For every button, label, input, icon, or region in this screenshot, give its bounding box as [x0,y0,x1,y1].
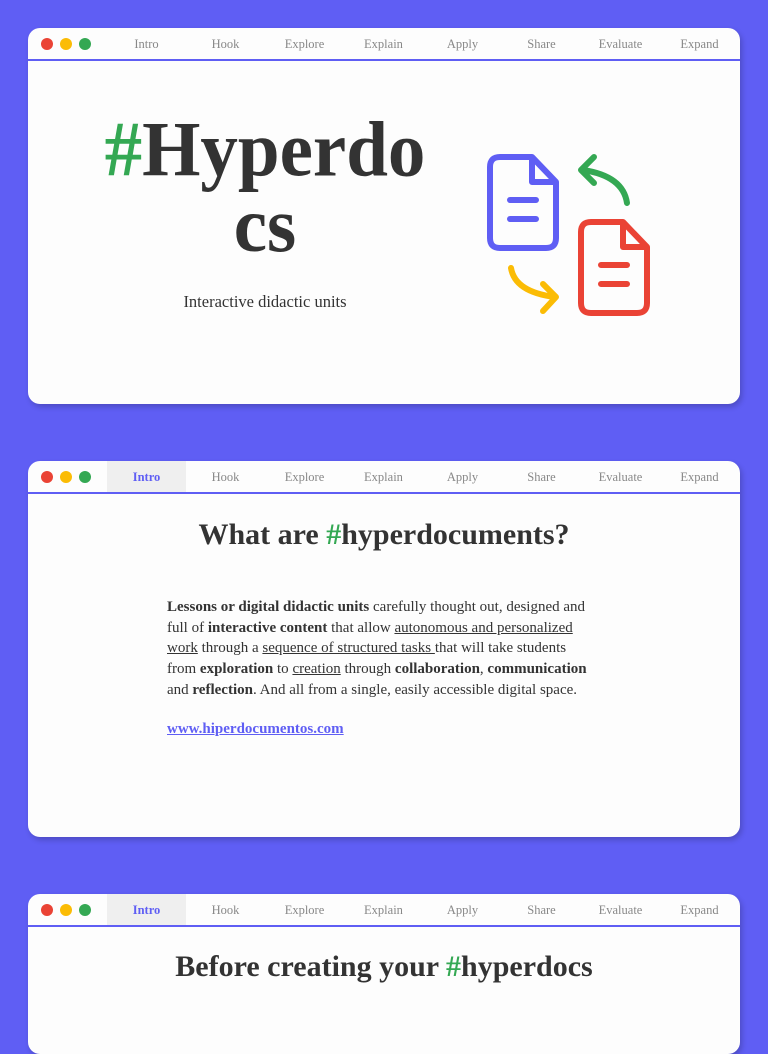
nav bar: Evaluate [599,37,642,51]
nav bar: Apply [447,903,478,917]
panel: before creating [28,894,740,1054]
nav bar: Apply [447,470,478,484]
icon: documents exchange [487,154,650,316]
link: www.hiperdocumentos.com [167,721,344,737]
title: #Hyperdo [105,106,425,193]
nav bar: Explain [364,903,403,917]
nav bar: Share [527,470,556,484]
nav bar: Hook [212,470,239,484]
title: cs [234,182,296,269]
nav bar: Expand [680,903,719,917]
nav bar: Share [527,903,556,917]
nav bar: Explore [285,470,324,484]
text block: Lessons or digital didactic units carefully thought out, designed and full of interactive content that allow autonomous and personalized work through a sequence of structured tasks that will take students from exploration to creation through collaboration, communication and reflection. And all from a single, easily accessible digital space. [167,599,587,698]
nav bar: Explore [285,903,324,917]
nav bar [28,28,740,61]
panel: what are hyperdocuments [28,461,740,837]
nav bar: Evaluate [599,470,642,484]
nav bar: Hook [212,903,239,917]
nav bar: Apply [447,37,478,51]
nav bar: Intro [133,903,160,917]
heading: What are #hyperdocuments? [198,518,570,551]
nav bar: Expand [680,470,719,484]
nav bar: Explain [364,37,403,51]
subtitle: Interactive didactic units [183,292,347,311]
nav bar: Explain [364,470,403,484]
panel: title card [28,28,740,404]
nav bar: Hook [212,37,239,51]
nav bar [28,894,740,927]
nav bar: Share [527,37,556,51]
title [105,106,425,269]
nav bar: Expand [680,37,719,51]
nav bar [28,461,740,494]
nav bar: Explore [285,37,324,51]
heading: Before creating your #hyperdocs [175,950,593,983]
nav bar: Intro [133,470,160,484]
nav bar: Evaluate [599,903,642,917]
nav bar: Intro [134,37,159,51]
